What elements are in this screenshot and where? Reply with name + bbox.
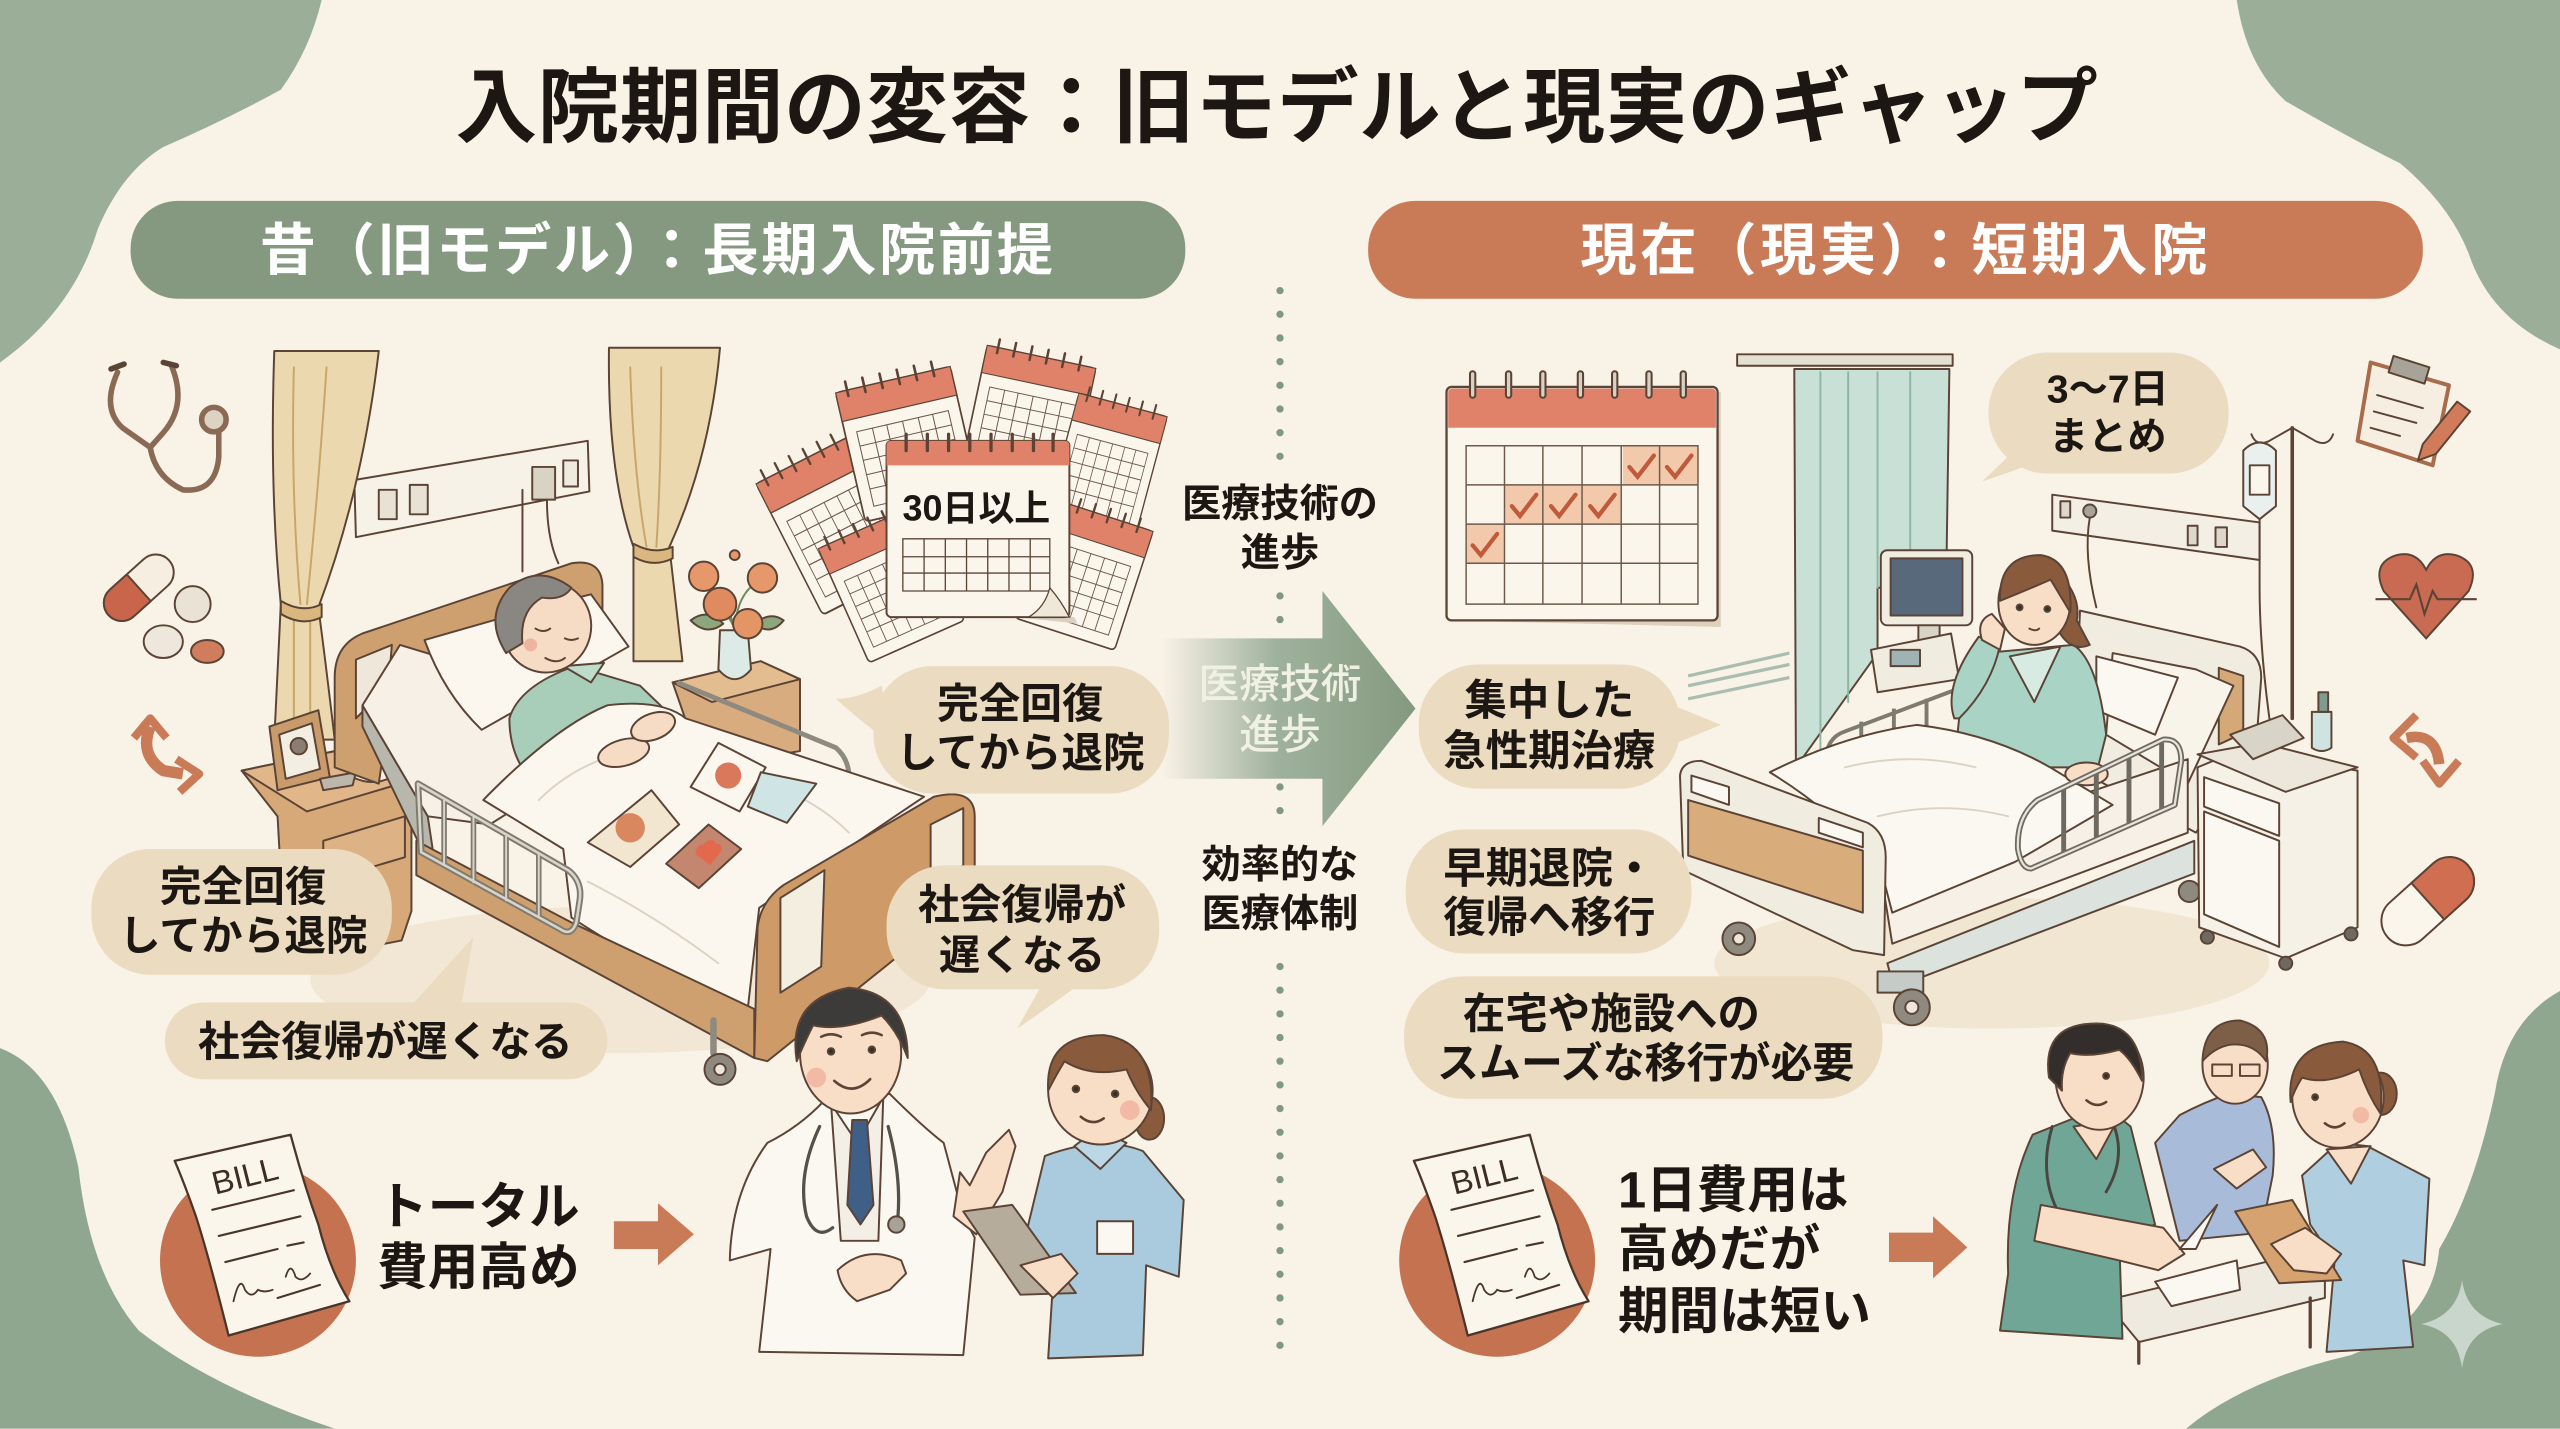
callout: recovery before discharge (upper) <box>836 666 1169 793</box>
text: higher daily cost, shorter stay <box>1618 1162 1871 1340</box>
illustration: stack of calendars <box>752 337 1169 663</box>
patient <box>490 569 682 793</box>
get-well cards <box>588 743 816 888</box>
illustration: care team with table <box>2000 1020 2429 1363</box>
cabinet with devices <box>2198 692 2358 970</box>
panel heading: current reality <box>1368 201 2423 299</box>
middle staff <box>2155 1094 2274 1241</box>
label: medical advances <box>1182 483 1378 575</box>
callout: recovery before discharge (upper): してから退院 <box>896 729 1145 776</box>
callout: intensive acute care: 急性期治療 <box>1443 728 1655 775</box>
panel heading: old model <box>131 201 1185 299</box>
callout: delayed return to society (two lines): 社会復帰が <box>918 881 1126 928</box>
illustration: nurse <box>963 1035 1184 1358</box>
callout: smooth transition: 在宅や施設への <box>1463 990 1760 1037</box>
callout: smooth transition: スムーズな移行が必要 <box>1437 1039 1854 1086</box>
panel heading: old model: 昔（旧モデル）：長期入院前提 <box>260 218 1053 281</box>
floor shadow <box>310 906 931 1053</box>
arrow: old model cost <box>614 1203 694 1265</box>
callout: smooth transition <box>1404 976 1882 1099</box>
icon: bill, current model <box>1399 1135 1595 1357</box>
wall panel <box>2052 495 2260 607</box>
center arrow <box>1162 591 1416 826</box>
arrow: current model cost <box>1889 1216 1967 1278</box>
wall rail <box>1688 653 1789 699</box>
text: higher daily cost, shorter stay: 1日費用は <box>1618 1162 1849 1219</box>
icon: bill, old model: BILL <box>208 1149 282 1202</box>
icon: clipboard with pencil <box>2358 356 2470 465</box>
icon: capsule <box>2371 847 2484 955</box>
flower table and vase <box>673 550 800 767</box>
center arrow: 医療技術 <box>1198 661 1362 707</box>
callout: intensive acute care: 集中した <box>1465 677 1634 724</box>
icon: bill, current model: BILL <box>1447 1149 1521 1202</box>
icon: pills <box>96 547 224 663</box>
icon: heart with pulse <box>2376 554 2477 638</box>
IV stand and drip <box>2243 428 2333 718</box>
callout: recovery before discharge (upper): 完全回復 <box>937 680 1104 727</box>
main calendar: 30日以上 <box>902 487 1050 528</box>
left staff in teal <box>2000 1113 2155 1339</box>
bed frame side <box>416 841 754 1085</box>
corner blob: top left <box>0 0 322 362</box>
patient <box>1952 555 2106 767</box>
callout: delayed return to society (single line) <box>165 937 607 1079</box>
callout: intensive acute care <box>1419 664 1721 789</box>
corner blob: bottom left <box>0 1048 335 1429</box>
sparkle <box>2421 1280 2503 1368</box>
icon: stethoscope <box>110 362 226 490</box>
callout: delayed return to society (two lines) <box>887 865 1159 1029</box>
callout: early discharge: 早期退院・ <box>1443 845 1655 892</box>
far bed rail <box>678 682 849 777</box>
wall panel <box>354 441 589 571</box>
label: efficient healthcare: 効率的な <box>1202 844 1358 887</box>
label: efficient healthcare <box>1202 844 1358 936</box>
main calendar <box>887 434 1078 624</box>
far side rail <box>1825 689 1958 780</box>
text: higher daily cost, shorter stay: 期間は短い <box>1618 1283 1871 1340</box>
text: high total cost <box>377 1178 580 1295</box>
blanket <box>483 704 924 1009</box>
title: 入院期間の変容：旧モデルと現実のギャップ <box>456 62 2098 153</box>
near bed rail <box>418 784 580 932</box>
panel heading: current reality: 現在（現実）：短期入院 <box>1580 218 2207 281</box>
callout: recovery before discharge (lower): 完全回復 <box>160 863 327 910</box>
foot board <box>1680 761 1886 955</box>
table with papers <box>2116 1257 2325 1342</box>
callout: delayed return to society (two lines): 遅くなる <box>939 932 1105 979</box>
text: high total cost: 費用高め <box>377 1238 580 1295</box>
icon: curved return arrows <box>2393 715 2459 784</box>
left curtain <box>273 351 379 740</box>
center arrow: 進歩 <box>1239 712 1321 758</box>
callout: early discharge: 復帰へ移行 <box>1443 894 1655 941</box>
icon: bill, old model <box>160 1135 356 1357</box>
bed base and blanket <box>1770 725 2194 993</box>
headboard <box>335 563 602 784</box>
callout: early discharge <box>1406 829 1691 953</box>
right staff in blue <box>2364 1073 2397 1115</box>
illustration: single calendar with checks <box>1447 374 1721 627</box>
label: efficient healthcare: 医療体制 <box>1202 893 1358 936</box>
corner blob: bottom right <box>2186 991 2560 1429</box>
icon: curved arrows <box>134 718 199 792</box>
callout: recovery before discharge (lower) <box>91 849 392 975</box>
text: high total cost: トータル <box>377 1178 580 1235</box>
callout: recovery before discharge (lower): してから退院 <box>119 912 368 959</box>
mattress and pillow <box>362 594 653 882</box>
bed head <box>2073 611 2261 833</box>
curtain and rail <box>1737 354 1953 767</box>
center dotted divider <box>1278 291 1282 1363</box>
illustration: doctor <box>730 988 1016 1355</box>
vitals monitor <box>1871 550 1972 692</box>
corner blob: top right <box>2237 0 2560 349</box>
callout: 3 to 7 days: 3〜7日 <box>2047 369 2169 412</box>
label: medical advances: 医療技術の <box>1182 483 1378 526</box>
label: medical advances: 進歩 <box>1241 532 1319 575</box>
callout: delayed return to society (single line): 社会復帰が遅くなる <box>198 1018 573 1065</box>
right curtain <box>609 348 720 661</box>
illustration: hospital room with long-stay patient <box>242 348 975 1085</box>
illustration: modern hospital room with short-stay patient <box>1680 354 2358 1029</box>
bed foot board <box>754 794 975 1061</box>
floor shadow <box>1714 898 2269 1029</box>
callout: 3 to 7 days <box>1982 353 2229 482</box>
callout: 3 to 7 days: まとめ <box>2049 416 2167 459</box>
near side rail <box>2018 739 2181 869</box>
bedside table with photo and mug <box>242 710 411 963</box>
bed wheels <box>1722 881 2200 1025</box>
text: higher daily cost, shorter stay: 高めだが <box>1618 1220 1820 1277</box>
